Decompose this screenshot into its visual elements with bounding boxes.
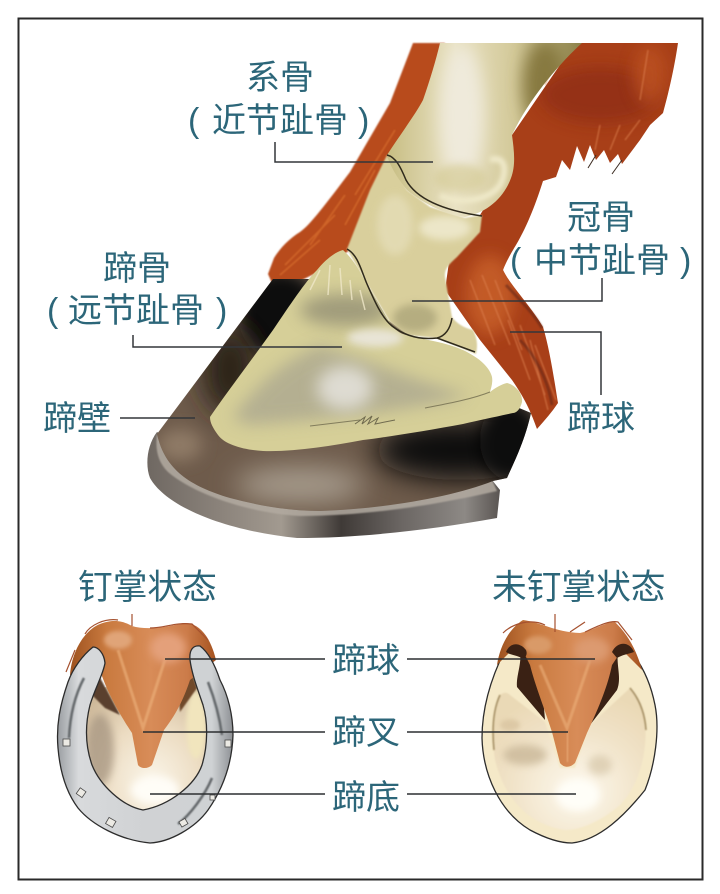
label: 蹄底 centre: 蹄底: [332, 779, 400, 817]
sole: [493, 688, 646, 830]
hoof wall: [157, 279, 531, 511]
frog and heel bulbs: [70, 621, 216, 768]
sole: [84, 670, 206, 812]
label: 中节趾骨: ): [680, 242, 691, 280]
label: 蹄骨: 蹄骨: [103, 250, 171, 288]
bone P1: [387, 40, 582, 217]
frog and heel bulbs: [497, 620, 642, 767]
illustration: side view of hoof: [147, 40, 678, 538]
tissue fibres: [470, 50, 648, 410]
label: 蹄壁: 蹄壁: [43, 400, 111, 438]
line: 蹄壁: [120, 417, 195, 419]
lines: bottom right: [407, 659, 595, 794]
label: 近节趾骨: ): [358, 102, 369, 140]
hair: [503, 614, 632, 640]
heel tips: [506, 644, 634, 658]
label: 中节趾骨: (: [510, 242, 521, 280]
label: 远节趾骨: (: [47, 292, 58, 330]
bone P2: [347, 155, 482, 354]
bone joint lines: [347, 155, 482, 352]
hair: [66, 614, 208, 672]
label: 近节趾骨: (: [188, 102, 199, 140]
lines: bottom left: [143, 659, 325, 794]
heading: 钉掌状态: 钉掌状态: [78, 568, 217, 607]
label: 蹄球 side: 蹄球: [567, 400, 635, 438]
nail heads: [63, 739, 231, 827]
front tissue: [268, 43, 445, 283]
line: 系骨: [275, 142, 433, 162]
label: 蹄球 centre: 蹄球: [332, 642, 400, 680]
shoe top face: [156, 434, 497, 516]
hoof wall: [482, 645, 657, 843]
label: 系骨: 系骨: [246, 59, 314, 97]
heading: 未钉掌状态: 未钉掌状态: [492, 568, 665, 607]
line: 蹄骨: [133, 335, 342, 347]
dark clefts: [92, 672, 120, 715]
illustration: shod hoof: [57, 614, 233, 843]
line: 冠骨: [412, 278, 602, 301]
label: 远节趾骨: 远节趾骨: [68, 292, 204, 330]
label: 远节趾骨: ): [216, 292, 227, 330]
bone P3: [210, 250, 522, 451]
horseshoe: [57, 646, 233, 843]
label: 近节趾骨: 近节趾骨: [212, 102, 348, 140]
label: 蹄叉 centre: 蹄叉: [332, 714, 400, 752]
line: 蹄球: [510, 332, 601, 395]
illustration: unshod hoof: [482, 614, 657, 843]
label: 中节趾骨: 中节趾骨: [534, 242, 670, 280]
label: 冠骨: 冠骨: [567, 199, 635, 237]
dark clefts: [517, 650, 545, 720]
shoe: [147, 432, 500, 538]
hair at top of bone: [310, 265, 365, 310]
rear tissue: [445, 43, 678, 429]
